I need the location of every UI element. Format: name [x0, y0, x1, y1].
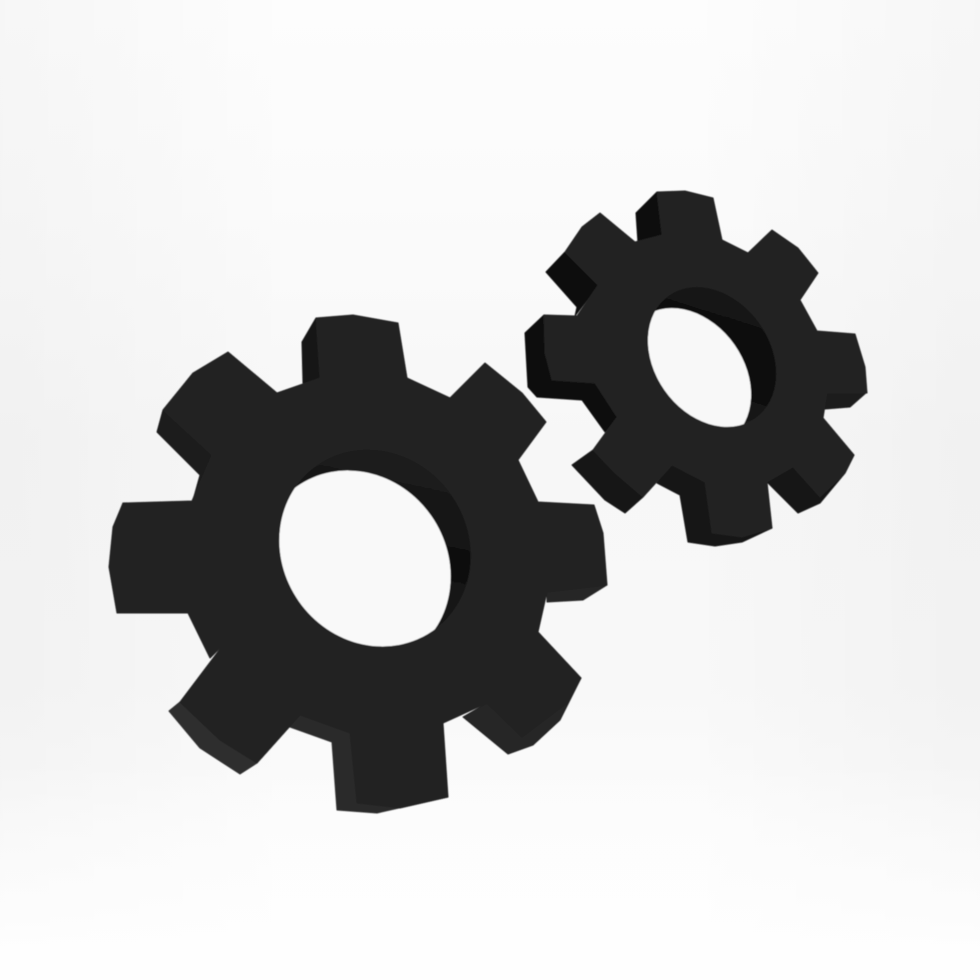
- large gear side faces: [109, 318, 607, 813]
- icon: small gear: [525, 191, 867, 546]
- large gear hole opening: [278, 470, 452, 648]
- small gear hole inner wall: [621, 262, 803, 452]
- small gear side faces: [525, 192, 867, 546]
- large gear front face: [118, 315, 607, 808]
- small gear hole opening: [647, 307, 752, 428]
- large gear hole inner wall: [241, 412, 509, 684]
- icon: large gear: [109, 315, 607, 813]
- small gear front face: [544, 191, 867, 537]
